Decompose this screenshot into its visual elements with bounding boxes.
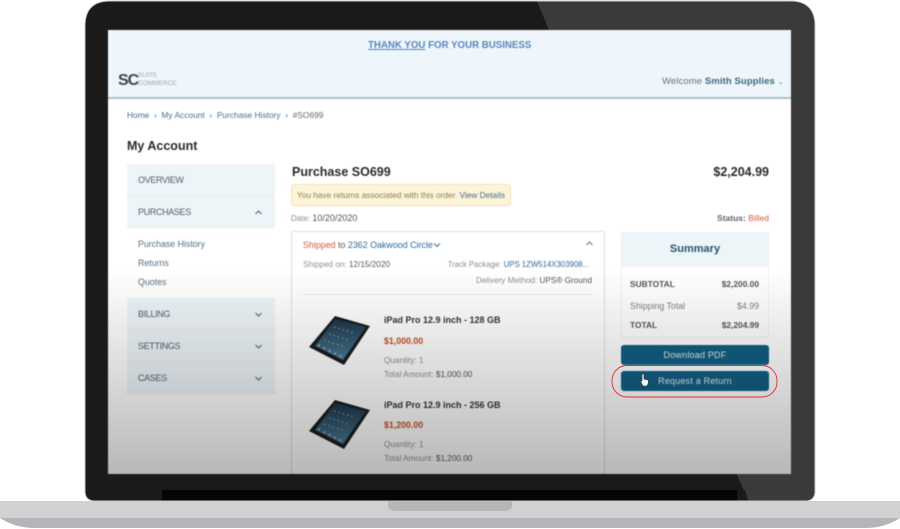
product 2 details: Quantity: 1 [384, 440, 424, 449]
request return button: Request a Return [658, 376, 732, 386]
nav: purchases: PURCHASES [138, 206, 191, 216]
shipment panel [291, 231, 605, 491]
summary heading: Summary [670, 243, 720, 255]
logo [118, 72, 177, 89]
delivery method: Delivery Method: UPS® Ground [476, 276, 592, 285]
highlight ring [612, 365, 778, 398]
summary panel: $4.99 [737, 301, 759, 311]
logo: SC [118, 72, 138, 89]
download button [621, 344, 769, 364]
logo: SUITE [138, 72, 157, 79]
product 2 details: Total Amount: $1,200.00 [384, 454, 472, 462]
nav: billing: BILLING [138, 308, 170, 318]
sidebar navigation: Returns [138, 258, 169, 268]
nav: settings [127, 330, 275, 362]
purchase title: Purchase SO699 [292, 165, 391, 179]
my account heading: My Account [127, 139, 197, 153]
promo banner: THANK YOU FOR YOUR BUSINESS [368, 40, 531, 51]
summary panel: $2,200.00 [722, 279, 759, 289]
nav: overview [127, 164, 275, 196]
order status: Status: Billed [717, 213, 769, 223]
product 1 details: $1,000.00 [384, 336, 423, 346]
shipping row: Shipping Total [630, 301, 685, 311]
download button: Download PDF [664, 350, 726, 360]
screen [108, 30, 791, 474]
shipped date: Shipped on: 12/15/2020 [303, 260, 390, 269]
bottom fade overlay [108, 270, 791, 474]
breadcrumb: Home › My Account › Purchase History › #SO699 [127, 110, 323, 120]
summary panel: $2,204.99 [722, 320, 759, 330]
total row: TOTAL [630, 320, 657, 330]
nav: billing [127, 298, 275, 330]
summary heading [622, 233, 768, 267]
nav: overview: OVERVIEW [138, 174, 184, 184]
product 2 details: $1,200.00 [384, 420, 423, 430]
nav: settings: SETTINGS [138, 340, 180, 350]
returns notice: You have returns associated with this order. View Details [297, 190, 505, 200]
welcome menu: Welcome Smith Supplies ⌄ [662, 76, 784, 87]
product 2 details: iPad Pro 12.9 inch - 256 GB [384, 400, 501, 410]
summary panel [621, 232, 769, 338]
nav: purchases [127, 196, 275, 228]
subtotal row: SUBTOTAL [630, 279, 675, 289]
product 1 image [308, 315, 370, 366]
icon: hand cursor [640, 374, 649, 386]
product 1 details [384, 315, 501, 378]
nav links: Purchase History [138, 238, 205, 248]
returns notice [291, 184, 511, 206]
tracking: Track Package: UPS 1ZW514X303908... [448, 260, 589, 269]
logo: COMMERCE [138, 80, 177, 87]
nav: cases [127, 362, 275, 394]
product 2 details [384, 400, 501, 462]
product 2 image [308, 399, 370, 450]
product 1 details: iPad Pro 12.9 inch - 128 GB [384, 315, 501, 325]
product 1 details: Total Amount: $1,000.00 [384, 370, 472, 378]
site header [108, 30, 791, 99]
order total: $2,204.99 [713, 165, 769, 179]
order date: Date: 10/20/2020 [291, 213, 357, 223]
request return button [621, 370, 769, 390]
shipment header: Shipped to 2362 Oakwood Circle [303, 240, 433, 250]
product 1 details: Quantity: 1 [384, 356, 424, 365]
nav: cases: CASES [138, 372, 167, 382]
collapse chevron [586, 240, 594, 246]
address chevron [433, 242, 441, 248]
sidebar navigation: Quotes [138, 277, 166, 287]
